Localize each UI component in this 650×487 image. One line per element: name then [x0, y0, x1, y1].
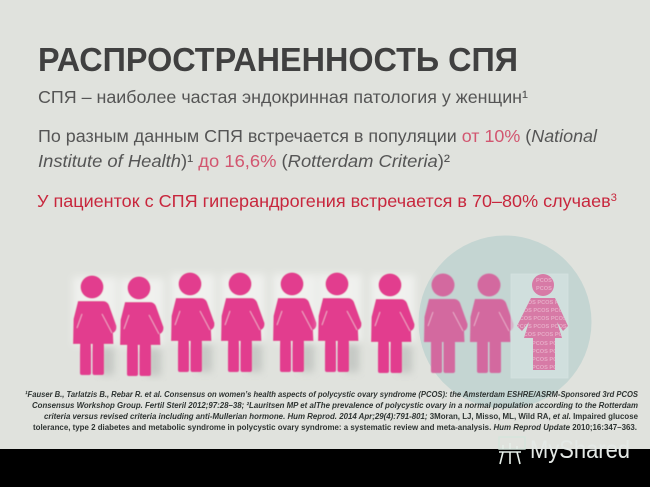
reference line 3: criteria versus revised criteria including anti-Mullerian hormone. Hum Reprod. 2014 Apr;29(4):791-801; 3Moran, LJ, Misso, ML, Wild RA, et al. Impaired glucose — [44, 411, 638, 421]
figure 5 — [273, 272, 317, 372]
figure 10 filled with PCOS text: PCOS PCOS — [532, 365, 566, 371]
title: РАСПРОСТРАНЕННОСТЬ СПЯ — [38, 41, 518, 78]
watermark text: MyShared — [530, 436, 630, 464]
references footnote — [25, 389, 638, 432]
row of figures — [73, 272, 514, 376]
figure 9 faded — [470, 274, 514, 373]
watermark icon — [499, 437, 525, 464]
figure 3 — [171, 272, 215, 372]
figure 10 filled with PCOS text — [517, 274, 568, 370]
statement: hyperandrogenism 70–80%: У пациенток с СПЯ гиперандрогения встречается в 70–80% случаев — [37, 191, 594, 211]
figure 10 filled with PCOS text: PCOS PCOS PCOS — [516, 324, 567, 330]
figure 1 — [73, 276, 117, 375]
figure 10 filled with PCOS text: PCOS PCOS — [532, 341, 566, 347]
figure 10 filled with PCOS text: PCOS PCOS PCOS — [516, 316, 567, 322]
statement: hyperandrogenism 70–80%: 3 — [611, 192, 617, 204]
figure 10 filled with PCOS text: PCOS PCOS PCOS — [520, 300, 571, 306]
highlighted figure with PCOS lettering — [510, 274, 568, 378]
figure 10 filled with PCOS text: PCOS PCOS — [532, 357, 566, 363]
prevalence line 1: По разным данным СПЯ встречается в популяции от 10% (National — [38, 126, 598, 146]
reference line 4: tolerance, type 2 diabetes and metabolic syndrome in polycystic ovary syndrome: a systematic review and meta-analysis. Hum Reprod Update 2010;16:347–363. — [33, 422, 637, 432]
prevalence line 2: Institute of Health )¹ до 16,6% (Rotterdam Criteria )² — [38, 151, 450, 171]
figure 2 — [120, 276, 164, 376]
statement: most common endocrine pathology: СПЯ – наиболее частая эндокринная патология у женщин¹ — [38, 87, 528, 107]
watermark — [499, 436, 630, 464]
figure 10 filled with PCOS text: PCOS PCOS PCOS — [520, 332, 571, 338]
teal highlight circle — [418, 236, 592, 408]
translucent panel — [511, 274, 568, 378]
black footer band — [0, 449, 650, 487]
figure 8 faded — [424, 274, 468, 373]
figure 6 — [318, 272, 362, 372]
figure 10 filled with PCOS text: PCOS — [536, 278, 552, 284]
figure 7 — [371, 274, 415, 373]
statement: prevalence from 10% to 16.6% — [38, 126, 598, 171]
figure 10 filled with PCOS text: PCOS PCOS PCOS — [516, 308, 567, 314]
figure 10 filled with PCOS text: PCOS PCOS — [532, 349, 566, 355]
figure 4 — [221, 272, 265, 372]
figure 10 filled with PCOS text: PCOS — [536, 286, 552, 292]
